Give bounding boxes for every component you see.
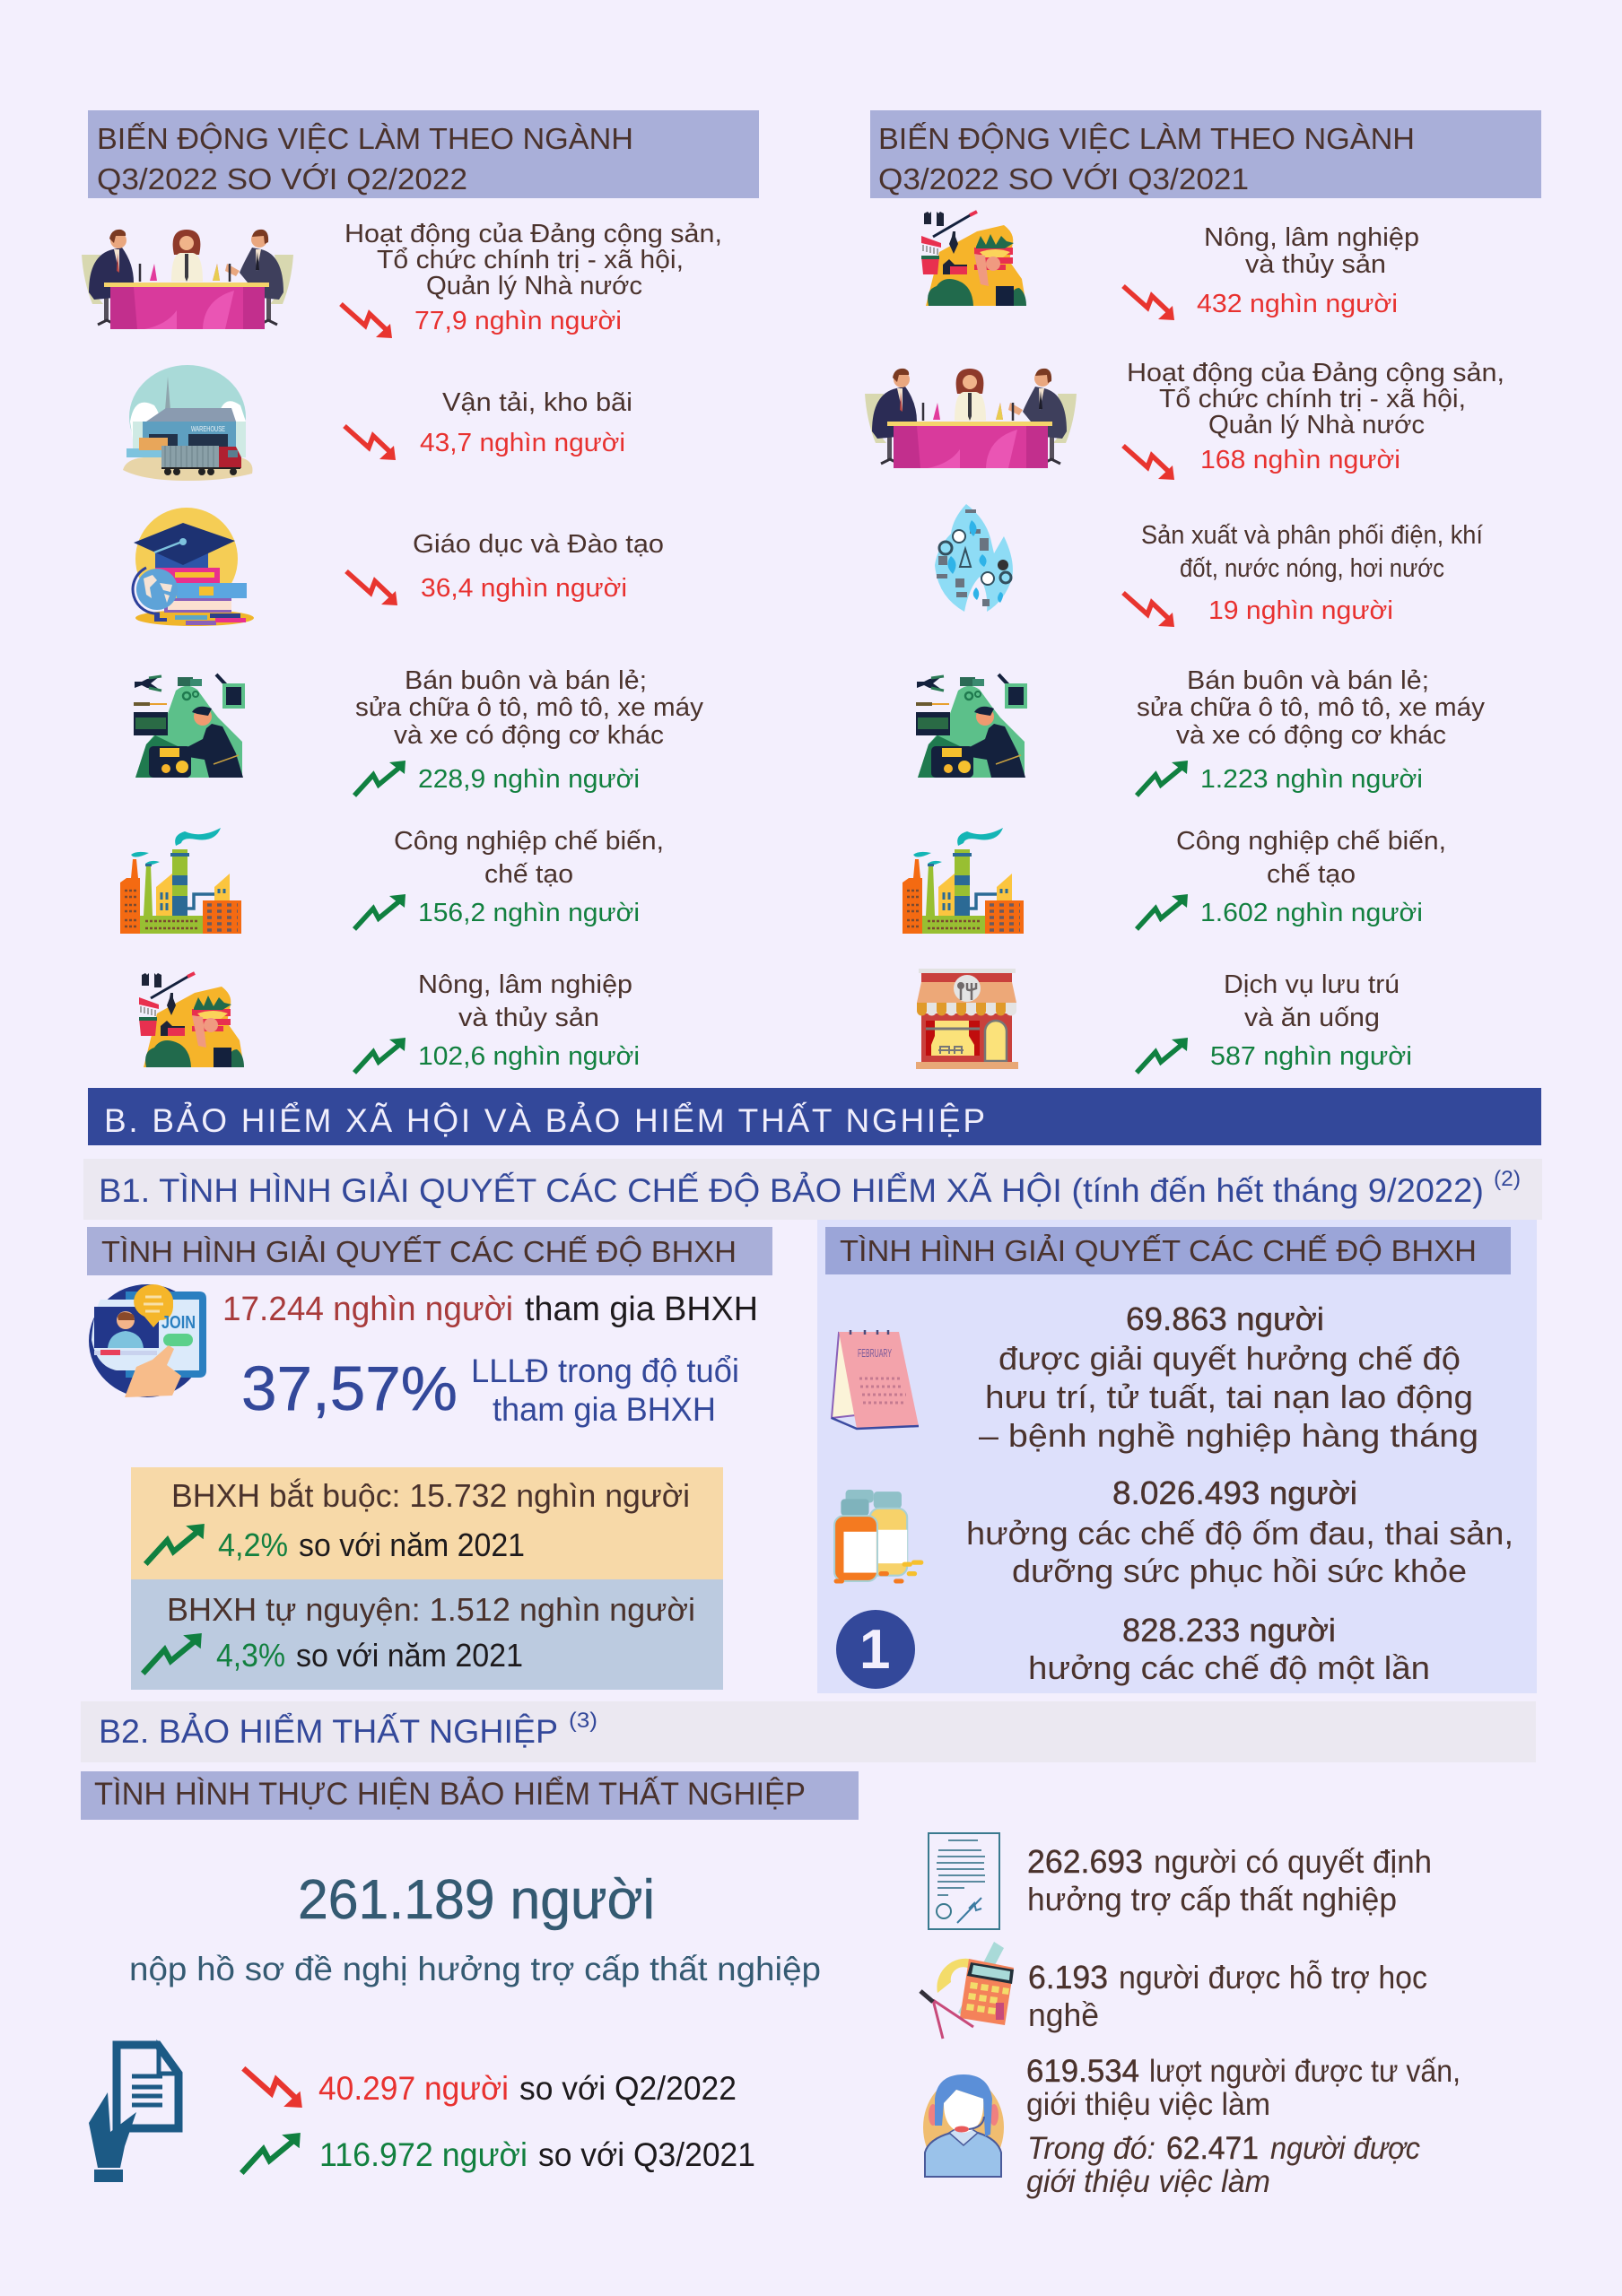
stat: 261.189 người: 261.189 người	[298, 1869, 655, 1931]
panel: BHXH tự nguyện: 4,3%	[216, 1637, 285, 1674]
heading: section B banner	[88, 1088, 1541, 1145]
text: trong đó 62.471 người: 62.471	[1166, 2131, 1259, 2166]
text: 8.026.493 người: 8.026.493 người	[1112, 1474, 1357, 1511]
text: 262.693 người: 262.693	[1027, 1843, 1143, 1880]
panel: header Q3/2022 so với Q2/2022: BIẾN ĐỘNG VIỆC LÀM THEO NGÀNH	[97, 122, 633, 155]
text: Giáo dục và Đào tạo: Giáo dục và Đào tạo	[413, 530, 664, 559]
text: so với Q2/2022: so với Q2/2022	[519, 2070, 737, 2107]
text: Bán buôn và bán lẻ (right): 1.223 nghìn người	[1200, 765, 1423, 794]
text: Nông, lâm nghiệp (right)	[1197, 223, 1419, 318]
text: Dịch vụ lưu trú: và ăn uống	[1244, 1004, 1380, 1032]
arrow: up	[354, 761, 406, 796]
heading: B2 sub header	[81, 1771, 859, 1820]
icon: number one	[836, 1610, 915, 1689]
text: 6.193 người: nghề	[1028, 1996, 1099, 2033]
heading: B2 sub header: TÌNH HÌNH THỰC HIỆN BẢO HIỂM THẤT NGHIỆP	[94, 1776, 806, 1812]
panel: BHXH tự nguyện: BHXH tự nguyện: 1.512 nghìn người	[167, 1591, 695, 1628]
text: Công nghiệp chế biến	[394, 827, 664, 927]
heading: left sub header: TÌNH HÌNH GIẢI QUYẾT CÁC CHẾ ĐỘ BHXH	[101, 1235, 737, 1268]
text: Nông, lâm nghiệp (right): Nông, lâm nghiệp	[1204, 223, 1419, 252]
panel: BHXH bắt buộc: 4,2%	[218, 1526, 288, 1563]
text: Đảng cộng sản (right)	[1127, 359, 1504, 474]
text: Vận tải, kho bãi: Vận tải, kho bãi	[442, 388, 632, 417]
stat: 37,57%: LLLĐ trong độ tuổi	[471, 1352, 739, 1389]
text: 828.233 người: hưởng các chế độ một lần	[1028, 1649, 1430, 1686]
icon: gas flame	[935, 504, 1013, 612]
icon: mechanic	[916, 674, 1027, 778]
text: Nông, lâm nghiệp: và thủy sản	[458, 1004, 599, 1032]
text: 6.193 người: người được hỗ trợ học	[1119, 1959, 1427, 1996]
stat: 37,57%	[241, 1352, 739, 1428]
text: Vận tải, kho bãi: 43,7 nghìn người	[420, 429, 625, 457]
heading: B1 band	[83, 1159, 1542, 1220]
text: 262.693 người	[1027, 1843, 1432, 1918]
text: Sản xuất và phân phối điện	[1141, 521, 1483, 625]
text: Đảng cộng sản (right): 168 nghìn người	[1200, 446, 1400, 474]
arrow: up	[1137, 1038, 1188, 1073]
text: 69.863 người: 69.863 người	[1126, 1300, 1324, 1337]
text: 619.534 lượt người	[1026, 2054, 1461, 2122]
text: Nông, lâm nghiệp	[418, 970, 640, 1071]
text: 8.026.493 người: dưỡng sức phục hồi sức khỏe	[1012, 1552, 1467, 1589]
text: trong đó 62.471 người	[1026, 2131, 1420, 2199]
heading: left sub header	[87, 1227, 772, 1275]
icon: pill bottles	[834, 1490, 921, 1581]
icon: calendar	[832, 1330, 919, 1429]
text: Bán buôn và bán lẻ: Bán buôn và bán lẻ;	[405, 666, 647, 695]
panel: BHXH bắt buộc: so với năm 2021	[299, 1526, 525, 1563]
text: Bán buôn và bán lẻ (right): sửa chữa ô tô, mô tô, xe máy	[1137, 693, 1486, 722]
text: Đảng cộng sản (right): Hoạt động của Đảng cộng sản,	[1127, 359, 1504, 387]
text: Đảng cộng sản: Tổ chức chính trị - xã hội,	[377, 246, 684, 274]
text: 69.863 người: – bệnh nghề nghiệp hàng tháng	[979, 1417, 1478, 1454]
panel: BHXH tự nguyện	[131, 1579, 723, 1690]
text: 8.026.493 người	[966, 1474, 1513, 1589]
icon: call center agent	[923, 2074, 1004, 2177]
text: 828.233 người	[1028, 1612, 1430, 1686]
text: 619.534 lượt người: 619.534	[1026, 2054, 1139, 2089]
text: Nông, lâm nghiệp: 102,6 nghìn người	[418, 1042, 640, 1071]
text: Đảng cộng sản: Quản lý Nhà nước	[426, 272, 642, 300]
arrow: down	[341, 304, 392, 338]
text: 6.193 người	[1028, 1959, 1427, 2033]
stat: 261.189 người	[129, 1869, 821, 1987]
text: Công nghiệp chế biến (right)	[1176, 827, 1446, 927]
panel: BHXH bắt buộc: BHXH bắt buộc: 15.732 nghìn người	[171, 1477, 690, 1514]
panel: left BHXH	[87, 1227, 772, 1690]
icon: meeting table	[82, 230, 293, 329]
text: so với Q3/2021: 116.972 người	[319, 2136, 528, 2173]
heading: right sub header	[825, 1227, 1511, 1274]
heading: right sub header: TÌNH HÌNH GIẢI QUYẾT CÁC CHẾ ĐỘ BHXH	[840, 1234, 1477, 1267]
icon: mechanic	[134, 674, 245, 778]
arrow: down	[344, 426, 396, 460]
text: Vận tải, kho bãi	[420, 388, 632, 457]
text: Đảng cộng sản (right): Tổ chức chính trị - xã hội,	[1159, 385, 1466, 413]
text: 69.863 người	[979, 1300, 1478, 1454]
icon: factory	[903, 828, 1024, 934]
icon: calendar: FEBRUARY	[858, 1346, 892, 1360]
text: Bán buôn và bán lẻ: sửa chữa ô tô, mô tô, xe máy	[355, 693, 703, 722]
arrow: down	[1123, 593, 1174, 627]
arrow: up	[241, 2133, 301, 2173]
text: 6.193 người: 6.193	[1028, 1959, 1108, 1996]
arrow: up	[354, 1038, 406, 1073]
text: 69.863 người: được giải quyết hưởng chế độ	[998, 1340, 1461, 1377]
panel: BHXH tự nguyện: so với năm 2021	[296, 1637, 523, 1674]
text: Công nghiệp chế biến: 156,2 nghìn người	[418, 899, 640, 927]
arrow: down	[1123, 446, 1174, 480]
text: Công nghiệp chế biến: Công nghiệp chế biến,	[394, 827, 664, 856]
icon: join tablet: JOIN	[161, 1313, 196, 1333]
stat: 37,57%: tham gia BHXH	[493, 1391, 716, 1428]
text: Bán buôn và bán lẻ (right): Bán buôn và bán lẻ;	[1187, 666, 1429, 695]
heading: B1 band: (2)	[1494, 1167, 1521, 1191]
panel: header Q3/2022 so với Q2/2022	[88, 110, 759, 198]
heading: section B banner: B. BẢO HIỂM XÃ HỘI VÀ BẢO HIỂM THẤT NGHIỆP	[104, 1101, 985, 1139]
text: Bán buôn và bán lẻ: và xe có động cơ khác	[394, 721, 664, 750]
text: Công nghiệp chế biến (right): Công nghiệp chế biến,	[1176, 827, 1446, 856]
icon: farmer	[139, 973, 244, 1067]
arrow: up	[354, 894, 406, 929]
text: trong đó 62.471 người: người được	[1270, 2131, 1420, 2166]
text: so với Q3/2021: so với Q3/2021	[538, 2136, 755, 2173]
text: trong đó 62.471 người: Trong đó:	[1027, 2131, 1155, 2166]
icon: restaurant	[916, 969, 1018, 1069]
text: Sản xuất và phân phối điện: Sản xuất và phân phối điện, khí	[1141, 521, 1483, 550]
icon: hand holding document	[89, 2045, 179, 2182]
icon: farmer	[921, 212, 1026, 306]
heading: B2 band: B2. BẢO HIỂM THẤT NGHIỆP	[99, 1712, 558, 1750]
text: so với Q2/2022: 40.297 người	[318, 2070, 509, 2107]
icon: warehouse	[123, 365, 252, 481]
icon: factory	[120, 828, 241, 934]
text: Đảng cộng sản (right): Quản lý Nhà nước	[1208, 411, 1425, 439]
text: so với Q2/2022	[318, 2070, 737, 2107]
icon: warehouse: WAREHOUSE	[191, 425, 225, 433]
icon: graduation	[133, 508, 254, 626]
text: 619.534 lượt người: giới thiệu việc làm	[1026, 2087, 1270, 2122]
text: Giáo dục và Đào tạo: 36,4 nghìn người	[421, 574, 627, 603]
text: 69.863 người: hưu trí, tử tuất, tai nạn lao động	[985, 1378, 1473, 1415]
text: Sản xuất và phân phối điện: đốt, nước nóng, hơi nước	[1180, 554, 1444, 583]
icon: meeting table	[865, 369, 1077, 468]
icon: number one: 1	[859, 1619, 890, 1681]
text: so với Q3/2021	[319, 2136, 755, 2173]
panel: header Q3/2022 so với Q2/2022: Q3/2022 SO VỚI Q2/2022	[97, 162, 467, 196]
text: Dịch vụ lưu trú: 587 nghìn người	[1210, 1042, 1412, 1071]
text: Dịch vụ lưu trú: Dịch vụ lưu trú	[1224, 970, 1400, 999]
arrow: down	[346, 571, 397, 605]
panel: header Q3/2022 so với Q3/2021: Q3/2022 SO VỚI Q3/2021	[878, 162, 1249, 196]
panel: header Q3/2022 so với Q3/2021: BIẾN ĐỘNG VIỆC LÀM THEO NGÀNH	[878, 122, 1415, 155]
text: 17.244 nghìn người: 17.244 nghìn người	[222, 1291, 513, 1328]
text: Nông, lâm nghiệp (right): và thủy sản	[1245, 250, 1386, 279]
text: Bán buôn và bán lẻ: 228,9 nghìn người	[418, 765, 640, 794]
text: 262.693 người: người có quyết định	[1154, 1843, 1432, 1880]
icon: join tablet	[89, 1284, 206, 1397]
text: 17.244 nghìn người	[222, 1291, 758, 1328]
arrow: up	[1137, 761, 1188, 796]
panel: right BHXH	[817, 1220, 1537, 1693]
stat: 261.189 người: nộp hồ sơ đề nghị hưởng trợ cấp thất nghiệp	[129, 1951, 821, 1987]
text: Đảng cộng sản: 77,9 nghìn người	[414, 307, 622, 335]
text: Bán buôn và bán lẻ (right): và xe có động cơ khác	[1176, 721, 1446, 750]
text: 262.693 người: hưởng trợ cấp thất nghiệp	[1027, 1881, 1397, 1918]
text: Đảng cộng sản: Hoạt động của Đảng cộng sản,	[344, 220, 722, 248]
text: Nông, lâm nghiệp: Nông, lâm nghiệp	[418, 970, 632, 999]
text: Dịch vụ lưu trú	[1210, 970, 1412, 1071]
text: Đảng cộng sản	[344, 220, 722, 335]
text: Bán buôn và bán lẻ	[355, 666, 703, 794]
text: Sản xuất và phân phối điện: 19 nghìn người	[1208, 596, 1393, 625]
heading: B2 band: (3)	[569, 1709, 597, 1733]
arrow: down	[243, 2068, 302, 2108]
text: Giáo dục và Đào tạo	[413, 530, 664, 603]
text: 619.534 lượt người: lượt người được tư vấn,	[1149, 2054, 1461, 2089]
arrow: up	[1137, 894, 1188, 929]
icon: signed paper	[929, 1833, 999, 1929]
heading: B1 band: B1. TÌNH HÌNH GIẢI QUYẾT CÁC CHẾ ĐỘ BẢO HIỂM XÃ HỘI (tính đến hết tháng 9/2022)	[99, 1171, 1484, 1209]
text: Nông, lâm nghiệp (right): 432 nghìn người	[1197, 290, 1398, 318]
text: 17.244 nghìn người: tham gia BHXH	[525, 1291, 758, 1328]
text: Công nghiệp chế biến (right): 1.602 nghìn người	[1200, 899, 1423, 927]
heading: B2 band	[81, 1701, 1536, 1762]
arrow: down	[1123, 286, 1174, 320]
icon: calculator and drawing tools	[920, 1942, 1014, 2039]
text: Bán buôn và bán lẻ (right)	[1137, 666, 1486, 794]
text: 8.026.493 người: hưởng các chế độ ốm đau, thai sản,	[966, 1515, 1513, 1552]
text: 828.233 người: 828.233 người	[1122, 1612, 1336, 1648]
panel: BHXH bắt buộc	[131, 1467, 723, 1579]
panel: header Q3/2022 so với Q3/2021	[870, 110, 1541, 198]
text: trong đó 62.471 người: giới thiệu việc làm	[1026, 2164, 1270, 2199]
text: Công nghiệp chế biến: chế tạo	[484, 860, 573, 889]
stat: 37,57%: 37,57%	[241, 1353, 458, 1423]
text: Công nghiệp chế biến (right): chế tạo	[1267, 860, 1356, 889]
